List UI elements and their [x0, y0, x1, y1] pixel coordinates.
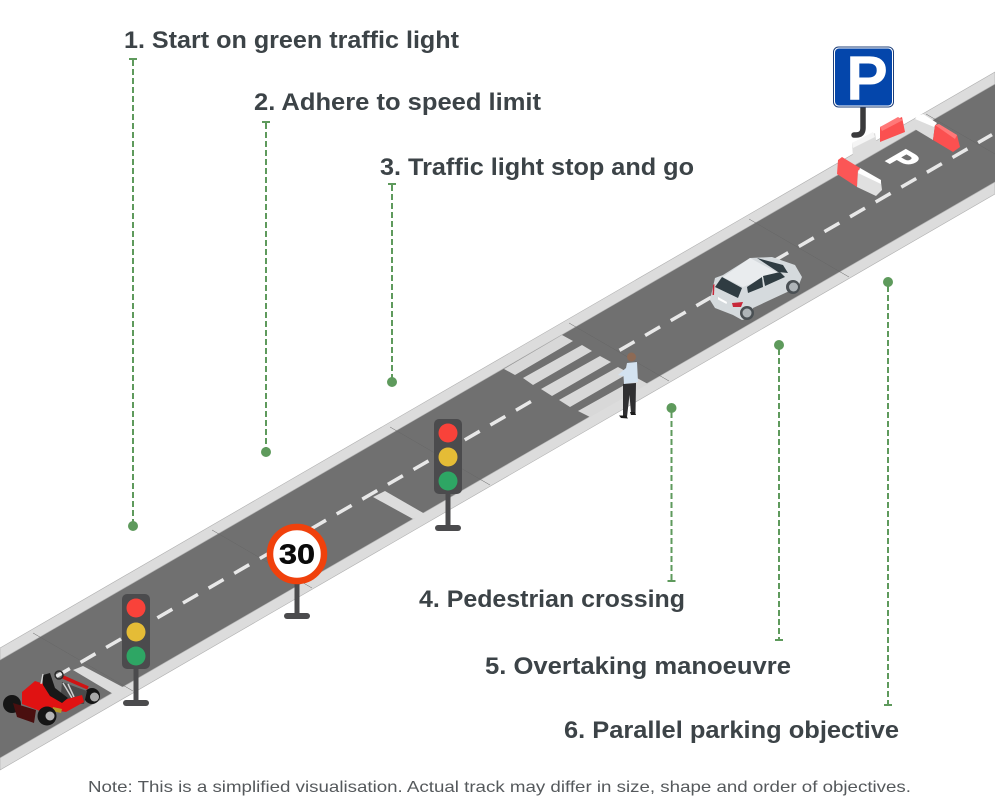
barrier: rear centre red [880, 117, 905, 142]
start line [73, 666, 132, 698]
heading 1: 1. Start on green traffic light [124, 27, 459, 54]
centre line dashes [55, 135, 992, 677]
icon: speed limit sign: 30 [279, 538, 315, 570]
icon: go-kart [3, 671, 100, 726]
heading 6: 6. Parallel parking objective [564, 717, 899, 744]
icon: pedestrian [618, 352, 638, 418]
icon: traffic light 1 [122, 594, 150, 706]
barrier: front left [837, 157, 882, 196]
pedestrian crossing stripes [504, 335, 648, 417]
track segment joints [33, 114, 995, 691]
leader line 6 [883, 277, 893, 705]
leader line 2 [261, 122, 271, 457]
lower sidewalk [0, 182, 995, 770]
parking bay marking: P [878, 145, 929, 174]
leader line 3 [387, 184, 397, 387]
note: Note: This is a simplified visualisation. Actual track may differ in size, shape and order of objectives. [88, 779, 911, 796]
heading 2: 2. Adhere to speed limit [254, 89, 541, 116]
icon: traffic light 2 [434, 419, 462, 531]
stop line [373, 491, 425, 519]
heading 3: 3. Traffic light stop and go [380, 154, 694, 181]
icon: speed limit sign [270, 527, 324, 619]
icon: parking sign [834, 44, 894, 135]
upper sidewalk [0, 72, 995, 660]
barrier: rear left white [852, 132, 877, 158]
heading 5: 5. Overtaking manoeuvre [485, 653, 791, 680]
barrier: right [913, 114, 960, 152]
heading 4: 4. Pedestrian crossing [419, 586, 685, 613]
leader line 4 [666, 403, 676, 581]
leader line 5 [774, 340, 784, 640]
icon: parking barriers [837, 114, 960, 196]
leader line 1 [128, 59, 138, 531]
icon: white car [710, 257, 802, 320]
icon: parking sign: P [846, 44, 888, 114]
